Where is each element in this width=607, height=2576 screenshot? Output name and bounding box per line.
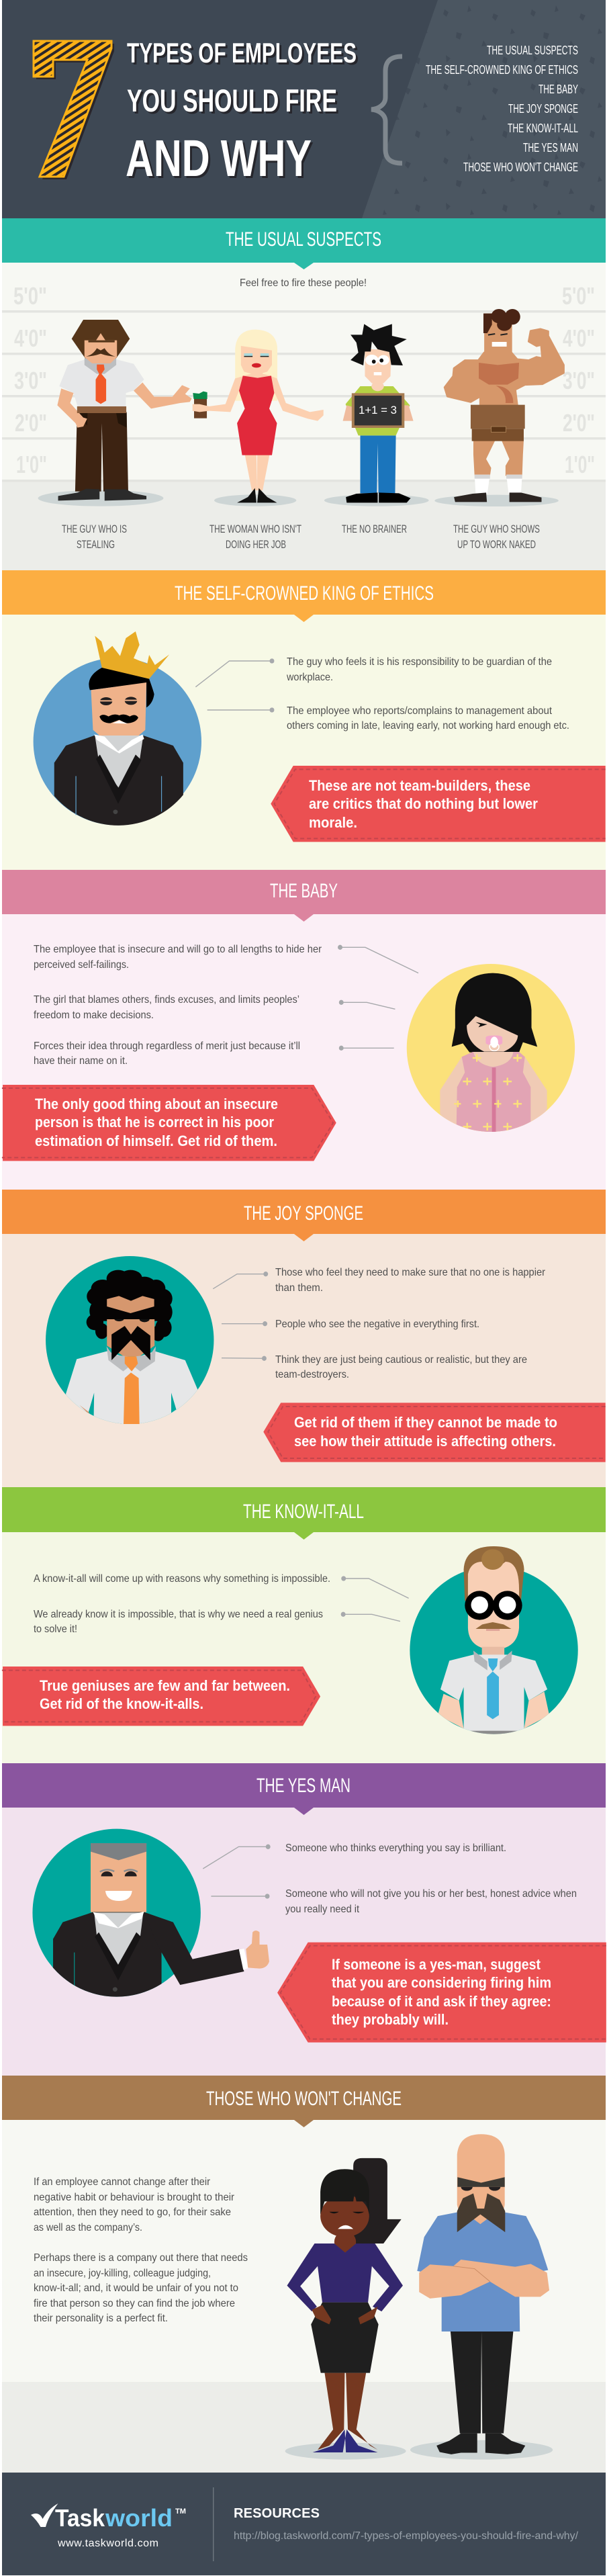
logo: Taskworld: world — [105, 2504, 173, 2532]
resources link: http://blog.taskworld.com/7-types-of-employees-you-should-fire-and-why/ — [234, 2530, 579, 2542]
section heading — [2, 1763, 606, 1815]
panel: footer — [2, 2473, 606, 2575]
text block: Think they are just being cautious or realistic, but they are — [275, 1354, 527, 1366]
height labels: 3'0" — [563, 367, 595, 394]
illustration: woman and man with crossed arms — [285, 2134, 553, 2460]
panel: the yes man — [2, 1763, 606, 2076]
illustration: baby — [338, 945, 575, 1133]
table of contents — [426, 44, 578, 174]
panel: the know-it-all — [2, 1487, 606, 1763]
text block: to solve it! — [34, 1624, 77, 1635]
text block: People who see the negative in everything first. — [275, 1319, 479, 1330]
text block: you really need it — [285, 1904, 359, 1915]
text block: The employee that is insecure and will go to all lengths to hide her — [34, 944, 322, 955]
text block: If an employee cannot change after their — [34, 2176, 211, 2188]
text block — [34, 1573, 330, 1635]
callout: Get rid of the know-it-alls. — [40, 1695, 203, 1712]
text block: perceived self-failings. — [34, 959, 129, 971]
text block — [275, 1267, 546, 1380]
captions: THE GUY WHO IS — [62, 523, 127, 535]
icon: big striped seven — [34, 41, 114, 179]
section heading — [2, 2076, 606, 2127]
callout: they probably will. — [332, 2011, 449, 2028]
character: woman — [285, 2158, 406, 2460]
illustration: yes man — [32, 1829, 271, 1997]
text block: The girl that blames others, finds excuses, and limits peoples’ — [34, 994, 299, 1006]
callout: see how their attitude is affecting others. — [294, 1433, 556, 1450]
text block: We already know it is impossible, that is why we need a real genius — [34, 1609, 323, 1620]
table of contents: THE YES MAN — [523, 141, 578, 154]
height labels: 1'0" — [16, 451, 47, 478]
section heading: THE JOY SPONGE — [244, 1202, 363, 1225]
callout: because of it and ask if they agree: — [332, 1993, 551, 2010]
callout: The only good thing about an insecure — [35, 1096, 278, 1112]
callout — [271, 766, 606, 842]
illustration: king — [34, 631, 274, 826]
text block — [34, 944, 322, 1067]
character: bald man — [410, 2134, 553, 2460]
callout — [277, 1943, 606, 2043]
illustration: know-it-all — [341, 1546, 578, 1735]
resources heading: RESOURCES — [234, 2506, 320, 2521]
section heading — [2, 1190, 606, 1241]
text block: than them. — [275, 1282, 323, 1294]
callout: morale. — [309, 814, 357, 831]
text block: A know-it-all will come up with reasons why something is impossible. — [34, 1573, 330, 1585]
captions — [62, 523, 540, 551]
section heading: THE BABY — [270, 880, 338, 902]
section heading: THE KNOW-IT-ALL — [243, 1501, 364, 1523]
title: AND WHY — [126, 130, 312, 187]
text block: negative habit or behaviour is brought to their — [34, 2192, 235, 2203]
character: naked guy with briefcase — [434, 309, 563, 506]
text block: Someone who will not give you his or her best, honest advice when — [285, 1888, 577, 1900]
text block: fire that person so they can find the job where — [34, 2298, 235, 2309]
section heading — [2, 570, 606, 622]
callout: Get rid of them if they cannot be made to — [294, 1414, 557, 1431]
callout: that you are considering firing him — [332, 1974, 551, 1991]
text block: Someone who thinks everything you say is brilliant. — [285, 1842, 506, 1854]
icon: money wad — [193, 392, 207, 418]
text block: freedom to make decisions. — [34, 1010, 154, 1021]
section heading — [2, 870, 606, 922]
text block: Forces their idea through regardless of merit just because it’ll — [34, 1040, 300, 1052]
text block: attention, then they need to go, for their sake — [34, 2207, 231, 2218]
logo: Taskworld: TM — [175, 2507, 186, 2516]
text block: Perhaps there is a company out there that needs — [34, 2252, 248, 2264]
callout — [2, 1085, 336, 1161]
panel: self-crowned king of ethics — [2, 570, 606, 870]
website address: www.taskworld.com — [57, 2538, 158, 2549]
intro text: Feel free to fire these people! — [240, 277, 367, 289]
text block: The employee who reports/complains to management about — [287, 705, 553, 717]
text block: workplace. — [286, 672, 333, 683]
text block — [286, 656, 569, 731]
height labels: 4'0" — [563, 324, 595, 352]
text block: their personality is a perfect fit. — [34, 2313, 168, 2324]
section heading — [2, 1487, 606, 1540]
panel: the baby — [2, 870, 606, 1190]
text block: others coming in late, leaving early, not working hard enough etc. — [287, 720, 569, 731]
table of contents: THE BABY — [539, 83, 578, 96]
callout: These are not team-builders, these — [309, 777, 530, 794]
callout: estimation of himself. Get rid of them. — [35, 1132, 277, 1149]
callout — [2, 1667, 320, 1726]
title — [126, 37, 357, 187]
logo: Taskworld — [31, 2503, 186, 2532]
captions: THE NO BRAINER — [342, 523, 407, 535]
text on chalkboard: 1+1 = 3 — [359, 404, 397, 416]
text block: Those who feel they need to make sure that no one is happier — [275, 1267, 546, 1278]
illustration: suspects — [38, 309, 563, 506]
logo: Taskworld: Task — [55, 2504, 105, 2532]
captions: STEALING — [77, 538, 115, 551]
height labels: 2'0" — [563, 409, 595, 437]
panel: the joy sponge — [2, 1190, 606, 1487]
text block: The guy who feels it is his responsibility to be guardian of the — [287, 656, 552, 668]
section heading — [2, 218, 606, 269]
height labels: 3'0" — [14, 367, 47, 394]
section heading: THE SELF-CROWNED KING OF ETHICS — [175, 582, 434, 605]
text block: team-destroyers. — [275, 1369, 349, 1380]
character: woman in red dress — [193, 330, 324, 506]
captions: DOING HER JOB — [226, 538, 286, 551]
callout: If someone is a yes-man, suggest — [332, 1956, 541, 1973]
section heading: THOSE WHO WON'T CHANGE — [206, 2088, 402, 2110]
callout: True geniuses are few and far between. — [40, 1677, 290, 1694]
height labels: 4'0" — [14, 324, 47, 352]
panel: header — [2, 0, 606, 218]
title: TYPES OF EMPLOYEES — [127, 37, 357, 69]
illustration: joy sponge — [46, 1256, 268, 1426]
height labels: 5'0" — [562, 282, 595, 310]
callout: are critics that do nothing but lower — [309, 795, 538, 812]
text block — [285, 1842, 577, 1915]
captions: THE GUY WHO SHOWS — [453, 523, 540, 535]
captions: THE WOMAN WHO ISN'T — [209, 523, 301, 535]
section heading: THE YES MAN — [256, 1775, 351, 1797]
text block: an insecure, joy-killing, colleague judging, — [34, 2268, 211, 2279]
character: thief — [38, 320, 192, 506]
text block: have their name on it. — [34, 1055, 128, 1067]
height labels: 2'0" — [15, 409, 47, 437]
text block: as well as the company’s. — [34, 2222, 142, 2233]
callout: person is that he is correct in his poor — [35, 1114, 274, 1130]
captions: UP TO WORK NAKED — [457, 538, 536, 551]
brace — [371, 56, 402, 163]
height labels — [13, 282, 595, 478]
callout — [263, 1403, 606, 1462]
height labels: 5'0" — [13, 282, 47, 310]
panel: those who won't change — [2, 2076, 606, 2473]
text block: know-it-all; and, it would be unfair of you not to — [34, 2282, 238, 2294]
panel: the usual suspects — [2, 218, 606, 570]
character: the no brainer — [324, 324, 429, 506]
text block — [34, 2176, 248, 2324]
title: YOU SHOULD FIRE — [127, 83, 337, 118]
section heading: THE USUAL SUSPECTS — [226, 228, 381, 251]
